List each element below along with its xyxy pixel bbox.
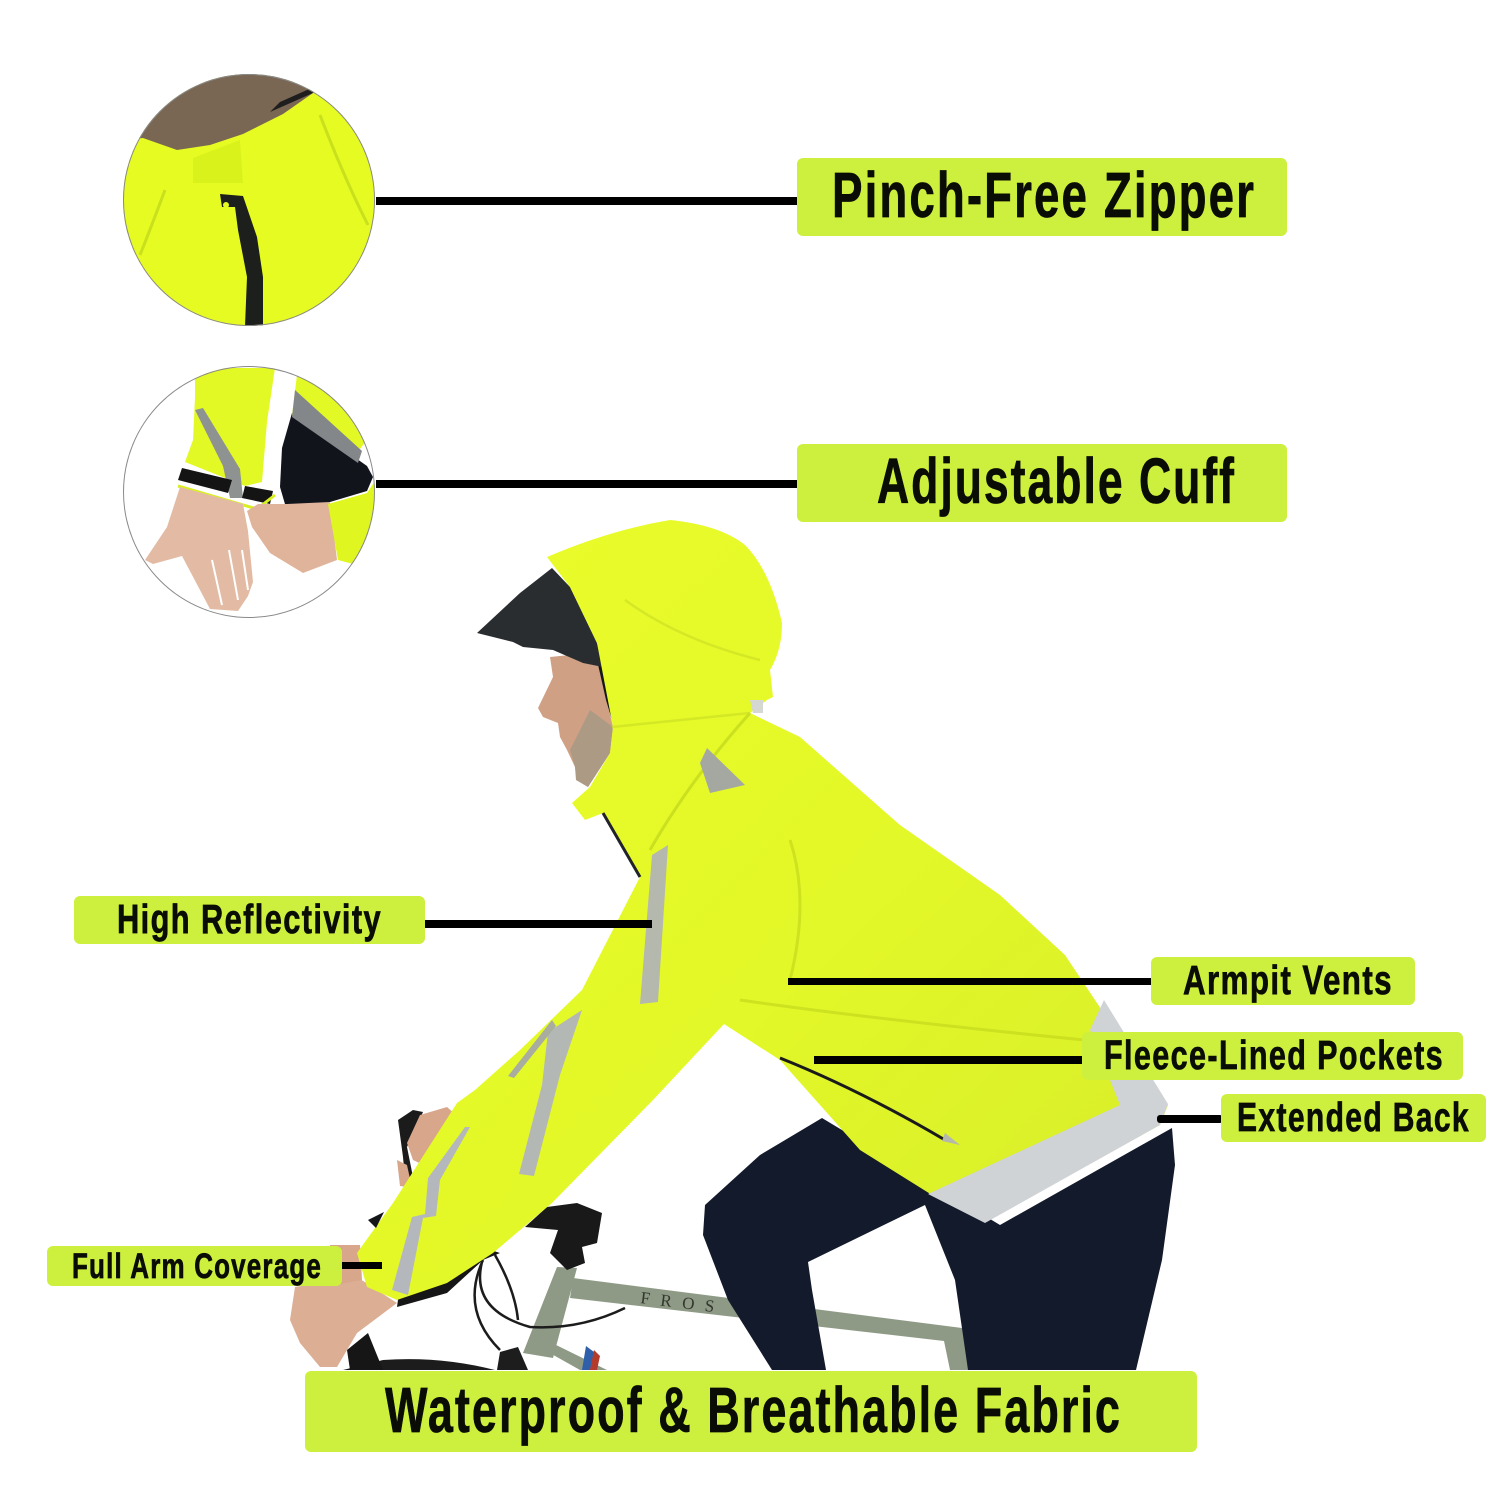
bike logo: FROS (640, 1288, 716, 1316)
title banner: Waterproof & Breathable Fabric (305, 1371, 1197, 1452)
label: Adjustable Cuff (797, 444, 1287, 522)
label: Armpit Vents: Armpit Vents (1183, 957, 1393, 1003)
label: Adjustable Cuff: Adjustable Cuff (877, 445, 1236, 517)
label: Pinch-Free Zipper: Pinch-Free Zipper (832, 159, 1256, 231)
connector: zipper (376, 197, 798, 205)
trousers (703, 1118, 1175, 1370)
hood and jacket body (357, 520, 1168, 1300)
label: Pinch-Free Zipper (797, 158, 1287, 236)
photo circle: pinch-free zipper (120, 70, 380, 330)
connector: armpit vents (788, 978, 1152, 985)
label: High Reflectivity: High Reflectivity (117, 896, 382, 942)
reflective strips (700, 748, 745, 793)
connector: pockets (814, 1056, 1084, 1064)
connector: arm coverage (342, 1262, 382, 1269)
hands (290, 1107, 465, 1367)
bicycle (343, 1110, 970, 1370)
pocket zipper (780, 1058, 945, 1140)
title banner: Waterproof & Breathable Fabric: Waterproof & Breathable Fabric (385, 1374, 1122, 1446)
rider jacket (357, 520, 1168, 1300)
label: Full Arm Coverage: Full Arm Coverage (72, 1247, 322, 1286)
connector: cuff (376, 480, 798, 488)
head and face (538, 655, 614, 787)
photo circle: adjustable cuff (120, 365, 380, 621)
helmet (477, 568, 603, 667)
connector: reflectivity (424, 920, 652, 928)
connector: extended back (1157, 1115, 1223, 1123)
